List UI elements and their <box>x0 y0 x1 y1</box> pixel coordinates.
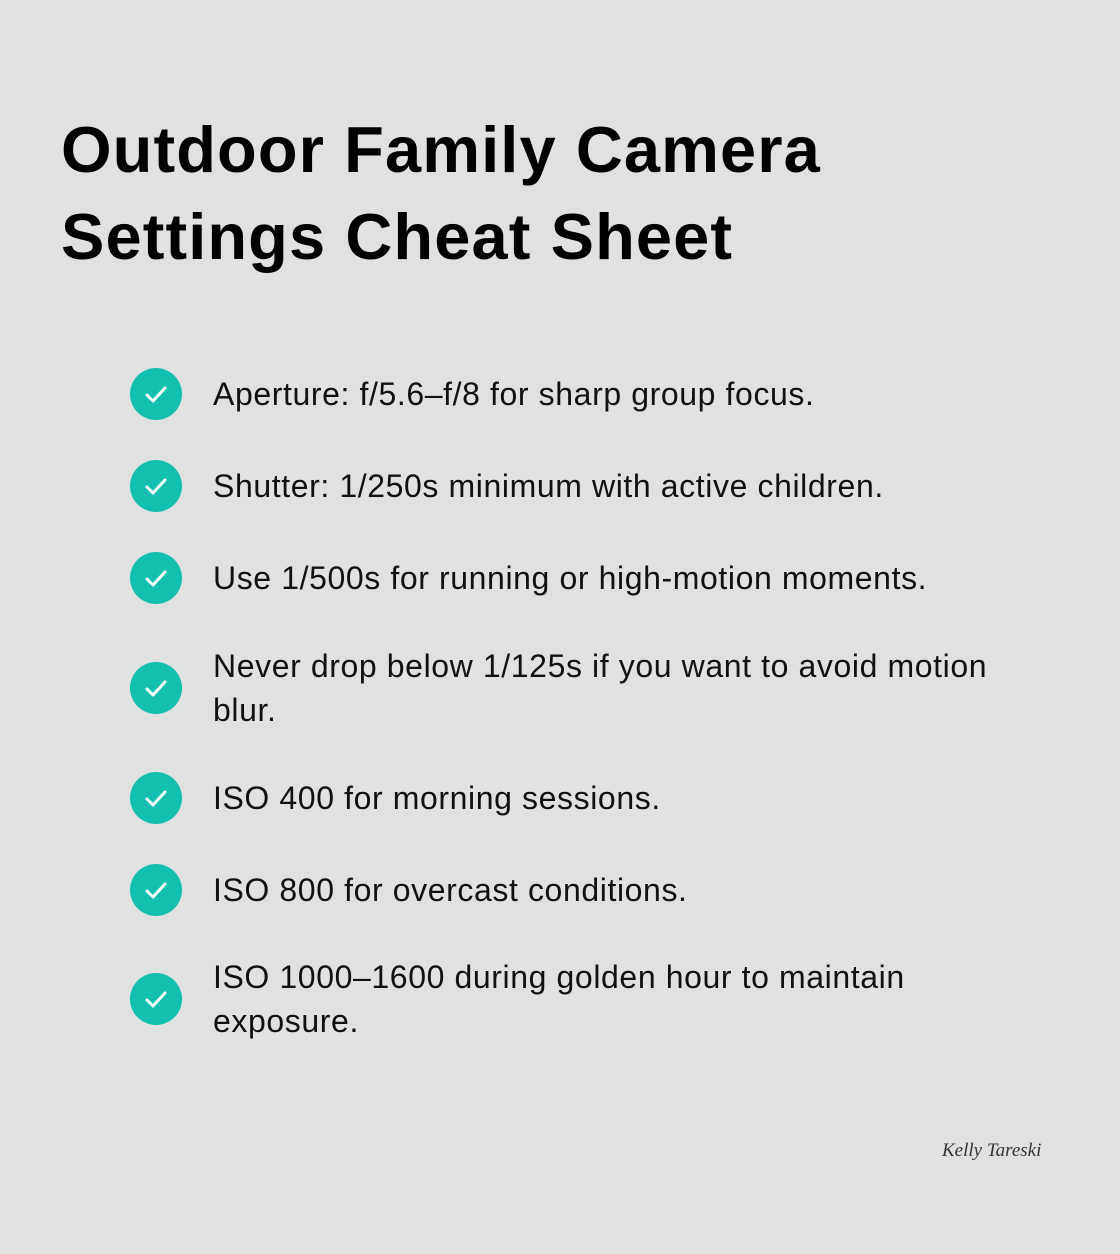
text: Never drop below 1/125s if you want to avoid motion blur. <box>213 648 987 728</box>
title <box>61 113 821 273</box>
item: shutter <box>130 460 884 512</box>
item: ISO 400 <box>130 772 661 824</box>
logo: Kelly Tareski <box>942 1140 1041 1161</box>
icon: check <box>130 772 182 824</box>
icon: check <box>130 973 182 1025</box>
item: aperture <box>130 368 815 420</box>
icon: check <box>130 864 182 916</box>
item: 1/125s <box>130 648 987 728</box>
icon: check <box>130 552 182 604</box>
icon: check <box>130 662 182 714</box>
item: ISO 1000-1600 <box>130 959 905 1039</box>
icon: check <box>130 368 182 420</box>
item: ISO 800 <box>130 864 688 916</box>
item: 1/500s <box>130 552 927 604</box>
text: ISO 800 for overcast conditions. <box>213 872 688 908</box>
title: Outdoor Family Camera <box>61 113 821 186</box>
text: ISO 1000–1600 during golden hour to maintain exposure. <box>213 959 905 1039</box>
text: Aperture: f/5.6–f/8 for sharp group focus. <box>213 376 815 412</box>
text: Use 1/500s for running or high-motion moments. <box>213 560 927 596</box>
icon: check <box>130 460 182 512</box>
title: Settings Cheat Sheet <box>61 200 733 273</box>
text: ISO 400 for morning sessions. <box>213 780 661 816</box>
text: Shutter: 1/250s minimum with active children. <box>213 468 884 504</box>
